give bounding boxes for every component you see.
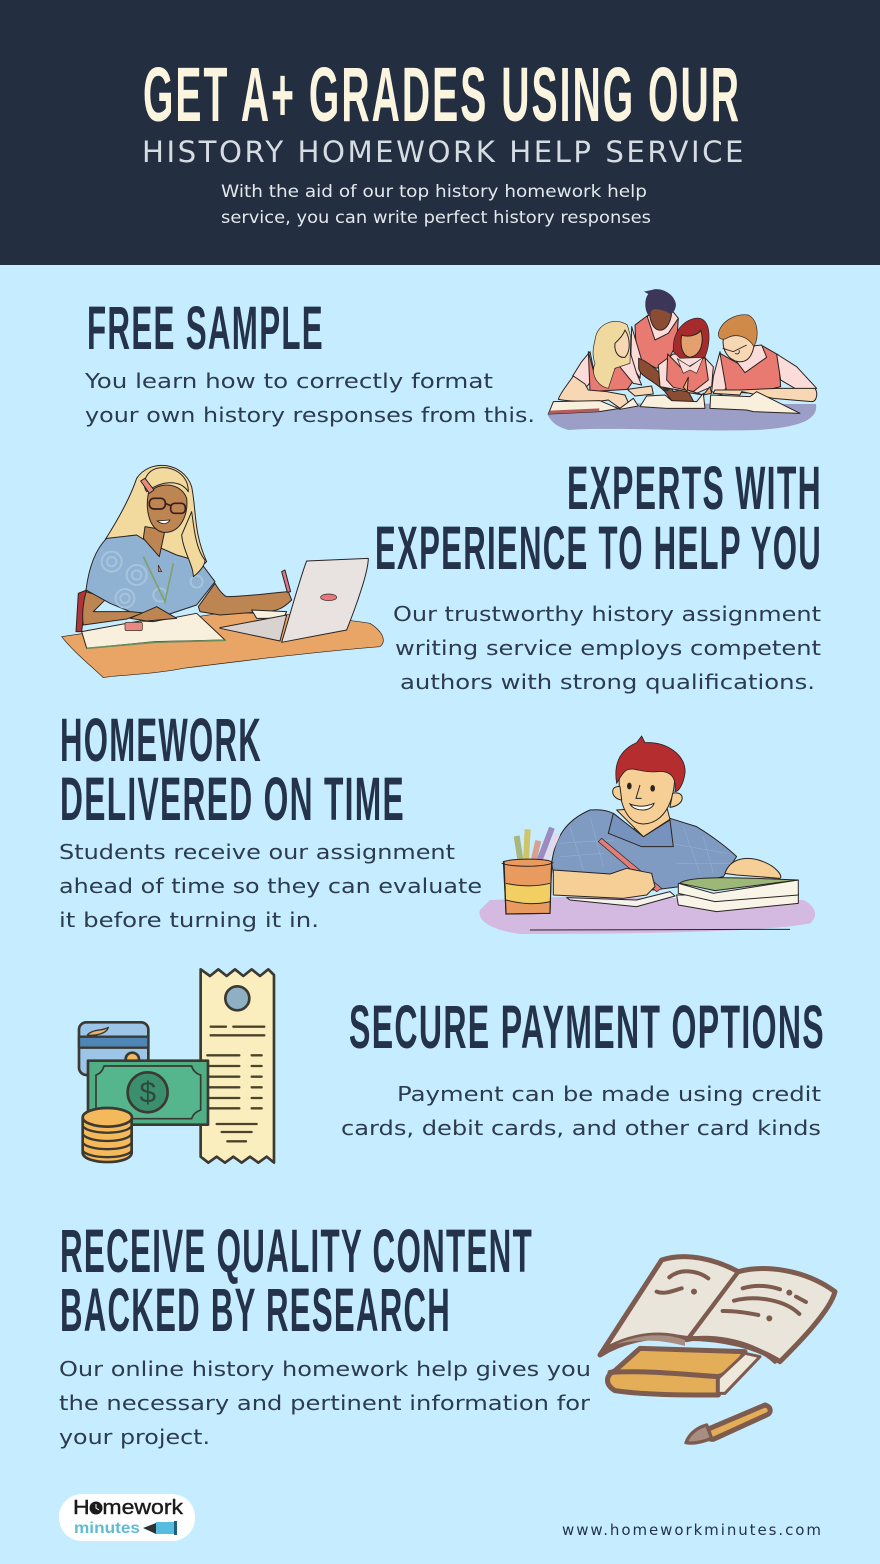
text: homework delivered xyxy=(59,840,482,932)
panel: experts with experience xyxy=(62,454,822,694)
text: quality content: Our online history homework help gives you xyxy=(59,1357,591,1381)
table xyxy=(547,403,816,430)
left arm xyxy=(725,858,781,878)
panel: homework delivered on time xyxy=(59,706,815,934)
student in glasses xyxy=(712,352,727,395)
illustration: books and pencil xyxy=(600,1257,835,1443)
header intro text xyxy=(221,182,651,227)
right arm xyxy=(198,583,292,615)
pencil xyxy=(707,1405,770,1439)
heading: experts xyxy=(375,454,822,582)
text: free sample: You learn how to correctly format xyxy=(84,369,493,393)
illustration: girl at laptop xyxy=(62,465,383,678)
blonde student xyxy=(573,352,595,387)
lanyard xyxy=(143,557,173,602)
illustration: four students studying xyxy=(547,289,817,430)
laptop lid xyxy=(282,558,368,642)
coin stack xyxy=(83,1118,132,1162)
laptop keyboard xyxy=(220,615,287,641)
neck xyxy=(143,527,165,557)
desk xyxy=(62,613,383,678)
text: secure payment: cards, debit cards, and other card kinds xyxy=(341,1116,821,1140)
hand on book xyxy=(130,607,177,621)
laptop logo xyxy=(321,594,337,601)
logo minutes: minutes xyxy=(74,1520,140,1537)
illustration: payment items xyxy=(79,969,274,1163)
banknote xyxy=(88,1061,208,1125)
eyes and smile xyxy=(627,783,655,792)
text: homework delivered: ahead of time so they can evaluate xyxy=(59,874,482,898)
dollar sign: $ xyxy=(139,1077,156,1110)
text: secure payment xyxy=(341,1082,821,1140)
open book xyxy=(82,613,225,648)
website url: www.homeworkminutes.com xyxy=(562,1521,821,1539)
text: experts xyxy=(393,602,821,694)
heading: homework delivered xyxy=(60,706,405,833)
logo clock xyxy=(90,1502,102,1514)
pencil xyxy=(598,838,662,892)
panel: quality content xyxy=(59,1217,835,1449)
logo: homework minutes xyxy=(59,1494,195,1541)
hair front xyxy=(144,468,188,492)
logo pencil xyxy=(143,1521,177,1535)
student in red hair xyxy=(658,354,713,393)
glasses xyxy=(149,498,185,513)
head xyxy=(619,763,675,824)
text: experts: Our trustworthy history assignment xyxy=(393,602,821,626)
left arm xyxy=(83,592,178,625)
credit card xyxy=(79,1022,148,1075)
stacked books xyxy=(677,893,798,912)
smile xyxy=(157,520,170,524)
open book xyxy=(600,1257,835,1362)
right arm and hand xyxy=(553,868,655,898)
student at back xyxy=(635,315,678,368)
text: homework delivered: it before turning it in. xyxy=(59,908,319,932)
open books xyxy=(548,398,638,414)
heading: homework delivered: HOMEWORK xyxy=(60,706,262,774)
hair xyxy=(616,736,685,792)
blue blouse xyxy=(86,535,215,615)
header intro text: service, you can write perfect history responses xyxy=(221,208,651,227)
face xyxy=(147,485,187,532)
panel: free sample xyxy=(84,289,817,430)
heading: homework delivered: DELIVERED ON TIME xyxy=(60,765,405,833)
shirt xyxy=(552,810,737,890)
header intro text: With the aid of our top history homework help xyxy=(221,182,647,201)
heading: quality content xyxy=(60,1217,533,1344)
hair back xyxy=(105,465,207,577)
text: secure payment: Payment can be made using credit xyxy=(397,1082,821,1106)
text: quality content: the necessary and pertinent information for xyxy=(59,1391,591,1415)
pencil cup xyxy=(517,828,557,862)
text: free sample: your own history responses from this. xyxy=(85,403,535,427)
text: quality content: your project. xyxy=(59,1425,210,1449)
page scribbles xyxy=(657,1271,806,1315)
panel: secure payment options xyxy=(79,969,825,1163)
receipt xyxy=(201,969,274,1163)
illustration: boy writing at desk xyxy=(479,736,815,934)
notebook xyxy=(252,610,287,618)
paper xyxy=(567,892,675,907)
logo wordmark: Homework xyxy=(73,1497,184,1519)
chair xyxy=(76,590,87,632)
subtitle: HISTORY HOMEWORK HELP SERVICE xyxy=(142,135,746,169)
panel: header xyxy=(0,0,880,265)
text: experts: writing service employs competent xyxy=(395,636,821,660)
text: homework delivered: Students receive our assignment xyxy=(59,840,455,864)
text: quality content xyxy=(59,1357,591,1449)
closed book xyxy=(607,1348,745,1395)
heading: quality content: BACKED BY RESEARCH xyxy=(60,1276,451,1344)
text: experts: authors with strong qualifications. xyxy=(400,670,815,694)
collar xyxy=(608,813,673,847)
heading: free sample: FREE SAMPLE xyxy=(87,294,324,362)
text: free sample xyxy=(84,369,535,427)
page spine band xyxy=(617,1335,685,1346)
desk xyxy=(479,897,815,934)
